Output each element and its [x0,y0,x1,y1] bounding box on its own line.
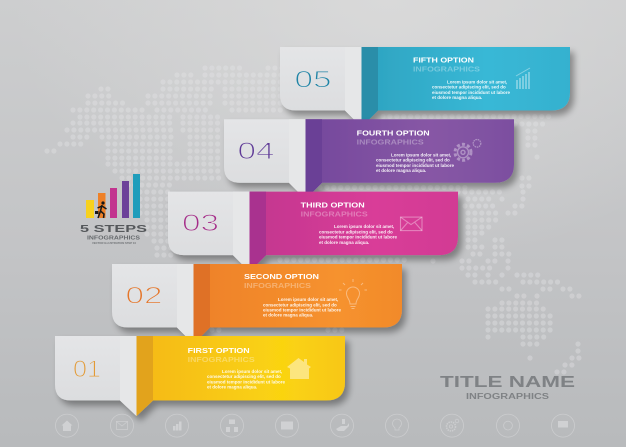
subheading: INFOGRAPHICS [413,64,480,74]
panel: fifth option [280,47,570,127]
subheading: INFOGRAPHICS [357,138,424,147]
body text: et dolore magna aliqua. [207,384,257,390]
panel: fourth option [224,119,514,199]
panel: first option [55,336,345,416]
step 5 [280,47,570,127]
body text: et dolore magna aliqua. [263,313,313,318]
icon: light bulb [339,279,367,308]
heading: FOURTH OPTION [357,129,430,138]
body text: consectetur adipiscing elit, sed do [263,302,337,307]
body text: consectetur adipiscing elit, sed do [319,230,393,235]
number 04: 04 [238,138,274,165]
icon: gears [455,140,481,160]
icon: envelope [400,217,422,231]
step 2 [112,264,402,344]
body text: eiusmod tempor incididunt ut labore [432,90,511,95]
icon: house [287,358,311,379]
body text: et dolore magna aliqua. [432,95,482,100]
heading: SECOND OPTION [244,272,319,281]
body text [376,152,455,173]
panel: third option [168,192,458,272]
body text [319,224,398,245]
body text: consectetur adipiscing elit, sed do [432,85,506,90]
body text [432,79,511,100]
number 02: 02 [126,282,162,310]
body text [263,297,342,318]
logo: 5 steps [80,174,147,245]
logo subtitle: INFOGRAPHICS [87,236,141,242]
step 4 [224,119,514,199]
subtitle: INFOGRAPHICS [466,392,550,401]
heading: THIRD OPTION [301,201,365,210]
icon: growth chart [516,68,530,89]
heading: FIRST OPTION [188,346,250,355]
number 03: 03 [182,210,219,237]
body text: Lorem ipsum dolor sit amet, [334,224,394,229]
subheading: INFOGRAPHICS [244,281,311,290]
body text: eiusmod tempor incididunt ut labore [263,308,342,312]
subheading: INFOGRAPHICS [188,355,255,364]
body text: et dolore magna aliqua. [376,168,426,173]
step 3 [168,192,458,272]
body text: Lorem ipsum dolor sit amet, [391,152,451,157]
bottom icon row [56,414,574,437]
subheading: INFOGRAPHICS [301,210,368,219]
logo small print: VECTOR ILLUSTRATION STEP 10 [92,242,137,245]
body text: et dolore magna aliqua. [319,240,369,245]
dotted world map [47,68,579,372]
body text [207,369,286,390]
heading: FIFTH OPTION [413,56,474,64]
body text: consectetur adipiscing elit, sed do [207,374,281,379]
logo bars [86,174,140,218]
body text: Lorem ipsum dolor sit amet, [447,79,507,84]
step 1 [55,336,345,416]
body text: eiusmod tempor incididunt ut labore [376,163,455,168]
body text: Lorem ipsum dolor sit amet, [222,369,282,374]
number 05: 05 [294,66,332,94]
panel: second option [112,264,402,344]
body text: consectetur adipiscing elit, sed do [376,158,450,163]
title: TITLE NAME [440,374,575,391]
body text: Lorem ipsum dolor sit amet, [278,297,338,302]
body text: eiusmod tempor incididunt ut labore [319,235,398,240]
body text: eiusmod tempor incididunt ut labore [207,379,286,384]
icon: running businessman [95,201,106,218]
logo title: 5 STEPS [80,223,147,235]
number 01: 01 [73,356,101,383]
